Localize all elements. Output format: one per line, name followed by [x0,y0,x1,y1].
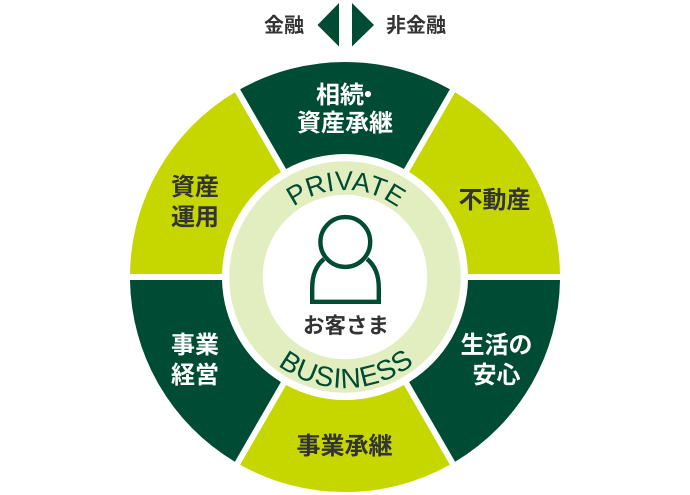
segment: 資産運用 [106,79,304,314]
icon: customer person [312,217,379,302]
segment: 資産運用: 運用 [171,204,219,231]
segment: 生活の安心 [386,240,584,475]
segment: 事業経営 [106,240,304,475]
icon: right arrow [352,3,374,46]
segment: 事業経営: 事業 [171,332,219,359]
segment: 事業承継 [240,385,450,492]
ring text: BUSINESS: BUSINESS [280,350,412,388]
ring text: PRIVATE: PRIVATE [286,171,406,207]
segment: 不動産 [386,79,584,314]
segment: 生活の安心: 安心 [472,362,520,389]
legend: finance / non-finance [264,3,446,46]
segment: 相続・資産承継: 相続 [316,82,364,109]
segment: 相続・資産承継: ・ [356,82,380,109]
segment: 生活の安心: 生活の [460,332,532,359]
segment: 不動産: 不動産 [458,187,530,214]
center ring [229,161,461,393]
label: 金融: 金融 [264,14,304,37]
label: 非金融: 非金融 [386,14,446,37]
segment: 事業承継: 事業承継 [296,433,392,460]
icon: left arrow [318,3,339,46]
label: お客さま: お客さま [303,314,389,338]
segment: 相続・資産承継 [240,62,450,169]
segment: 相続・資産承継: 資産承継 [297,110,393,137]
segment: 事業経営: 経営 [171,362,219,389]
segment: 資産運用: 資産 [171,174,219,201]
